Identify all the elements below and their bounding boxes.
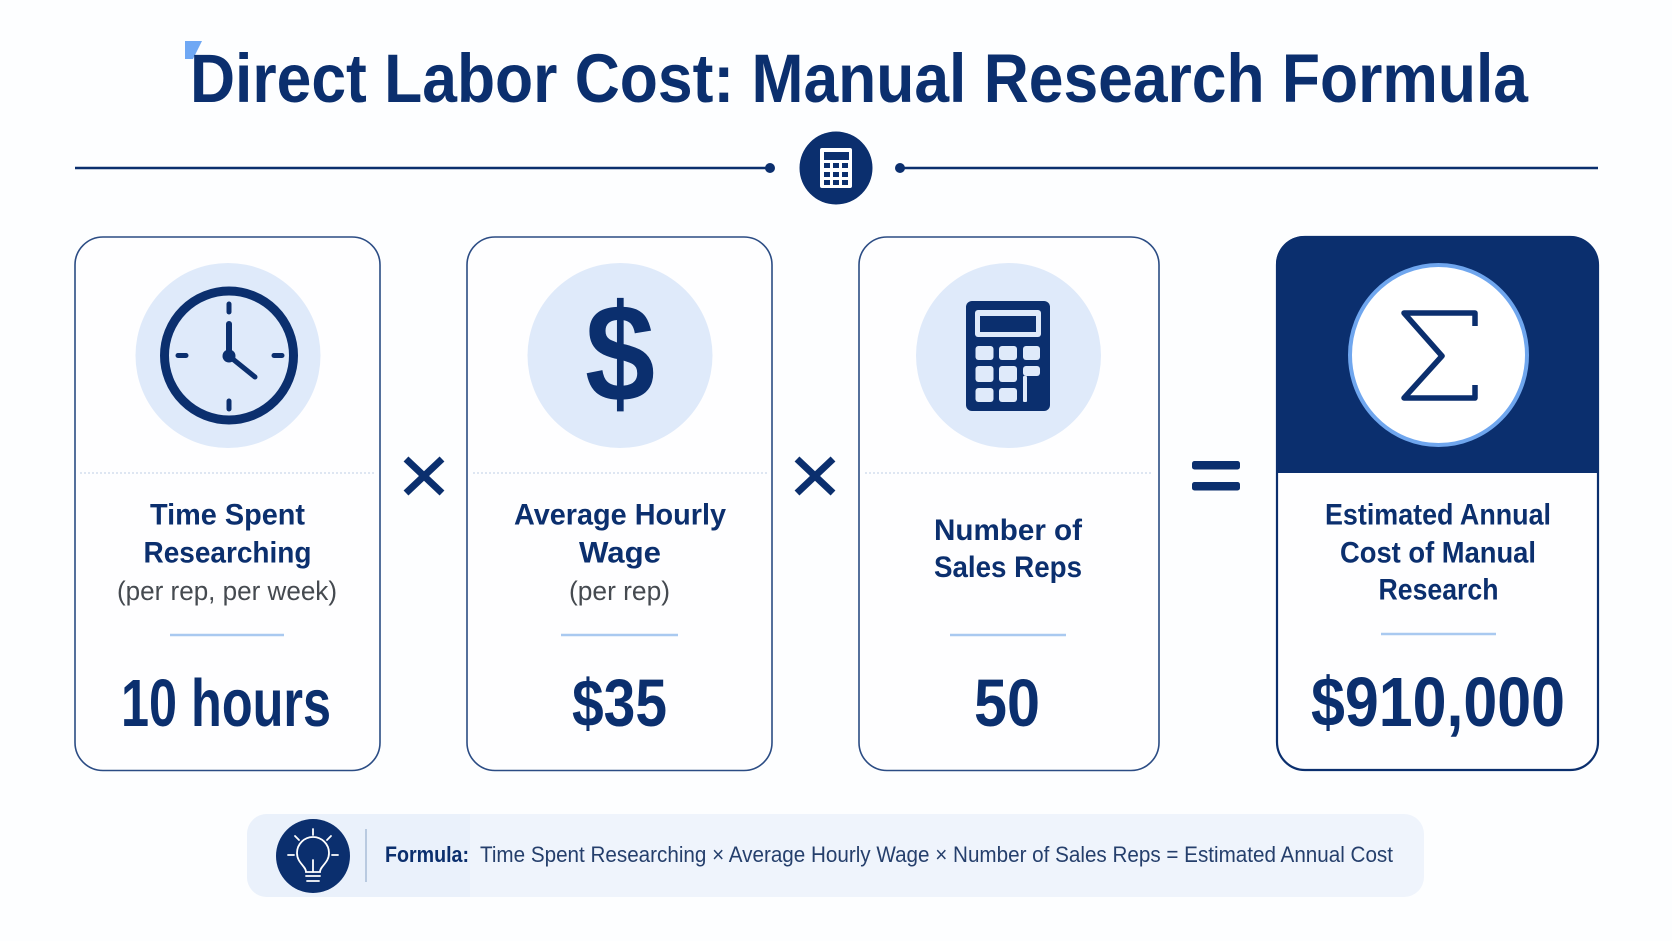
label: average hourly: Average Hourly — [514, 498, 726, 532]
formula label: Formula: — [385, 842, 469, 867]
label: time spent researching: Time Spent — [150, 498, 305, 532]
title: Direct Labor Cost: Manual Research Formula — [190, 40, 1529, 117]
operator: multiply — [406, 459, 442, 493]
icon: calculator — [916, 263, 1101, 448]
label: cost of manual: Cost of Manual — [1340, 536, 1536, 570]
icon: lightbulb — [276, 819, 350, 893]
sublabel: per rep per week: (per rep, per week) — [117, 576, 337, 606]
icon: dollar sign — [528, 263, 712, 448]
panel: number of sales reps — [859, 237, 1159, 770]
label: sales reps: Sales Reps — [934, 551, 1082, 584]
label: number of: Number of — [934, 514, 1083, 547]
title accent tick — [185, 41, 202, 59]
operator: multiply — [797, 459, 833, 493]
icon: dollar sign: $ — [585, 276, 655, 431]
label: estimated annual: Estimated Annual — [1325, 498, 1551, 532]
icon: clock — [136, 263, 320, 448]
label: wage: Wage — [579, 536, 661, 570]
value: 50: 50 — [974, 666, 1040, 741]
panel: formula bar — [247, 814, 1424, 897]
value: $910,000: $910,000 — [1311, 663, 1565, 741]
label: researching: Researching — [144, 536, 312, 570]
result header band — [1276, 236, 1598, 473]
header divider with calculator badge — [75, 132, 1598, 204]
operator: equals — [1192, 461, 1240, 490]
icon: sigma — [1350, 265, 1527, 445]
value: $35: $35 — [572, 666, 667, 741]
panel: average hourly wage — [467, 237, 772, 770]
icon: calculator badge — [800, 132, 872, 204]
panel: time spent researching — [75, 237, 380, 770]
panel: estimated annual cost — [1276, 236, 1598, 770]
label: research: Research — [1378, 574, 1498, 606]
sublabel: per rep: (per rep) — [569, 576, 670, 606]
value: 10 hours: 10 hours — [121, 666, 331, 741]
formula text: Time Spent Researching × Average Hourly Wage × Number of Sales Reps = Estimated Annual Cost — [480, 842, 1393, 867]
